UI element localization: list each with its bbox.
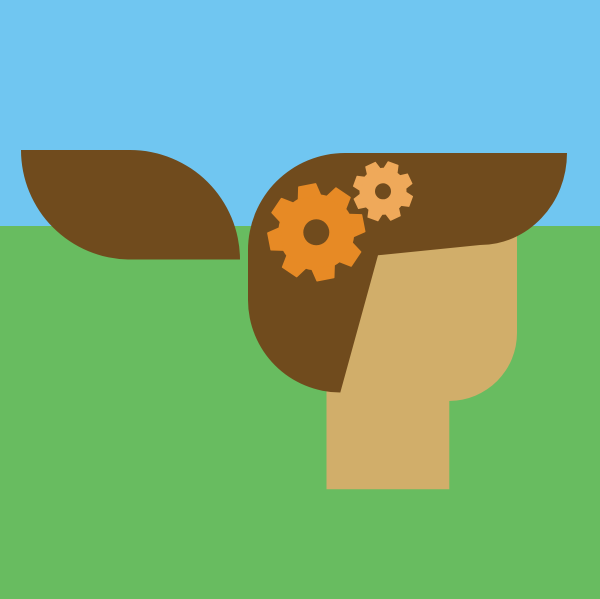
- icon: small light orange gear: [353, 161, 413, 221]
- sky background: [0, 0, 600, 226]
- icon: large orange gear: [267, 183, 365, 281]
- hair: [248, 153, 567, 392]
- head and neck: [326, 225, 517, 489]
- leaf-shaped hair tuft: [21, 150, 240, 260]
- grass background: [0, 226, 600, 599]
